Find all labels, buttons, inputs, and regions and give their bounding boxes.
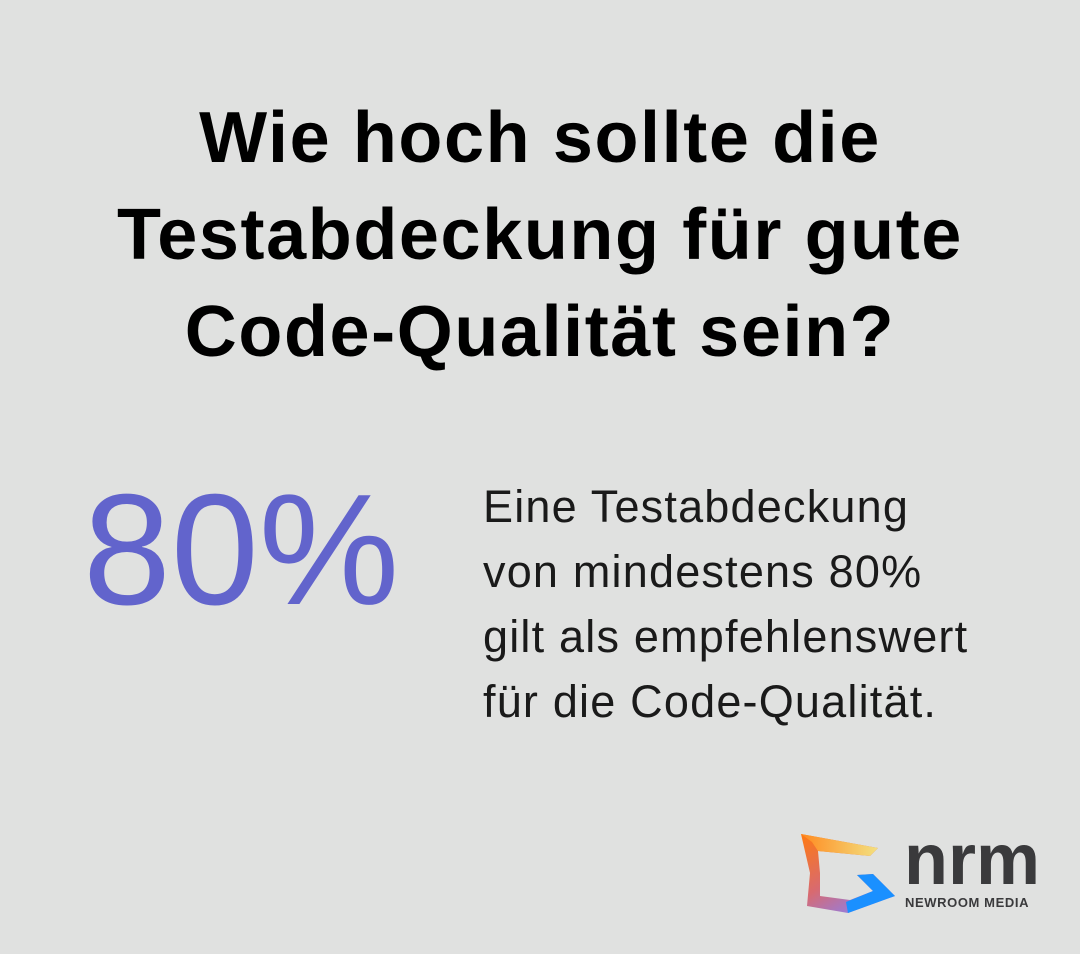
description text: für die Code-Qualität. — [483, 676, 937, 727]
title: Wie hoch sollte die — [199, 98, 881, 178]
logo — [801, 820, 1040, 913]
description text: gilt als empfehlenswert — [483, 611, 968, 662]
logo: NEWROOM MEDIA — [905, 895, 1029, 910]
big stat: 80% — [83, 462, 399, 638]
icon: logo mark — [801, 834, 895, 913]
logo text: nrm — [904, 820, 1040, 900]
title: Testabdeckung für gute — [117, 195, 963, 275]
description text — [483, 481, 968, 727]
title — [117, 98, 963, 372]
description text: von mindestens 80% — [483, 546, 922, 597]
description text: Eine Testabdeckung — [483, 481, 909, 532]
title: Code-Qualität sein? — [185, 292, 895, 372]
